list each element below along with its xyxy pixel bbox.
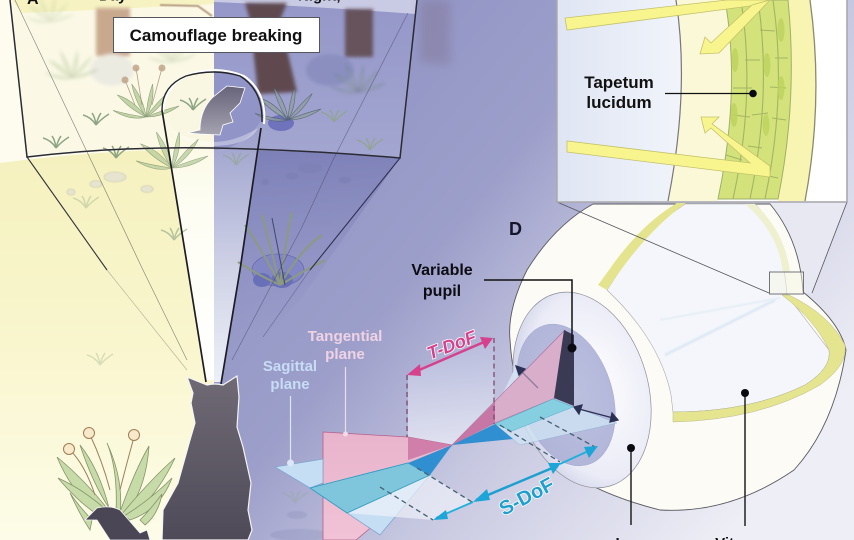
leader: lens (615, 444, 651, 540)
callout: Camouflage breaking (114, 18, 320, 52)
tangential plane: right pink sheet (408, 330, 565, 460)
background: daylight ground (0, 150, 214, 540)
label: Tapetum lucidum: lucidum (586, 93, 652, 112)
light panel between depth-of-field markers (408, 338, 494, 445)
label: Tapetum lucidum: Tapetum (584, 73, 654, 92)
label: Tangential plane: Tangential (308, 328, 382, 345)
foreground grass near rodent (136, 132, 208, 169)
panel label A and clipped heading (27, 0, 340, 8)
label: Tapetum lucidum (584, 73, 757, 112)
leader: vitreous (715, 389, 775, 540)
yellow retina layer inner (668, 0, 732, 201)
retina band upper (598, 203, 686, 290)
panel label D: D (509, 219, 522, 239)
background: daylight upper (0, 0, 214, 170)
T-DoF arrow and label (407, 326, 493, 376)
central vision cone (162, 72, 266, 382)
inset locator box and zoom lines (557, 202, 847, 294)
label: Variable pupil: pupil (423, 283, 461, 300)
T-DoF arrow and label: T-DoF (424, 326, 480, 364)
light ray bottom (567, 117, 770, 177)
frustum lower right (214, 150, 400, 385)
label: Tangential plane (308, 328, 382, 436)
panel A: daylight scene pane (10, 0, 214, 157)
retina band lower (673, 295, 845, 422)
eye: eyeball body (510, 203, 846, 510)
depth of field dashed guides (380, 338, 595, 520)
pupil opening (500, 311, 632, 479)
lens and iris disk (491, 276, 673, 504)
prey: rodent hidden by camouflage (188, 86, 245, 135)
vision frustum outlines (10, 0, 417, 384)
label: Variable pupil (411, 262, 576, 352)
label: Variable pupil: Variable (411, 262, 473, 279)
tapetum cell layer (718, 0, 791, 199)
background: dim-light half (214, 0, 854, 540)
pupil aperture arrows (516, 366, 618, 422)
dark wedge at pupil (554, 330, 574, 406)
bush with blue rocks (238, 212, 325, 288)
S-DoF arrows and label: S-DoF (496, 473, 558, 521)
cat silhouette (85, 376, 252, 540)
label: Sagittal plane (263, 358, 317, 466)
faint grass and rocks near planes (270, 491, 330, 540)
label: Sagittal plane: plane (270, 376, 310, 393)
pale plane beyond aperture (494, 366, 530, 412)
S-DoF arrows and label (433, 446, 598, 521)
panel B: dim-light scene pane (214, 0, 450, 158)
yellow outer layer (778, 0, 816, 201)
label: Tangential plane: plane (325, 346, 365, 363)
zoom wedge backdrop right of eye (770, 202, 847, 293)
plant with flowers (57, 428, 175, 530)
tangential plane: left pink sheet (323, 432, 452, 540)
callout: Camouflage breaking: Camouflage breaking (130, 26, 302, 45)
label: Sagittal plane: Sagittal (263, 358, 317, 375)
vitreous chamber (607, 204, 829, 412)
sagittal plane (275, 399, 617, 535)
inset panel: tapetum lucidum (557, 0, 847, 202)
light ray top (565, 0, 770, 54)
mid-ground grass tufts and rocks (43, 64, 383, 365)
vitreous side (558, 0, 681, 201)
